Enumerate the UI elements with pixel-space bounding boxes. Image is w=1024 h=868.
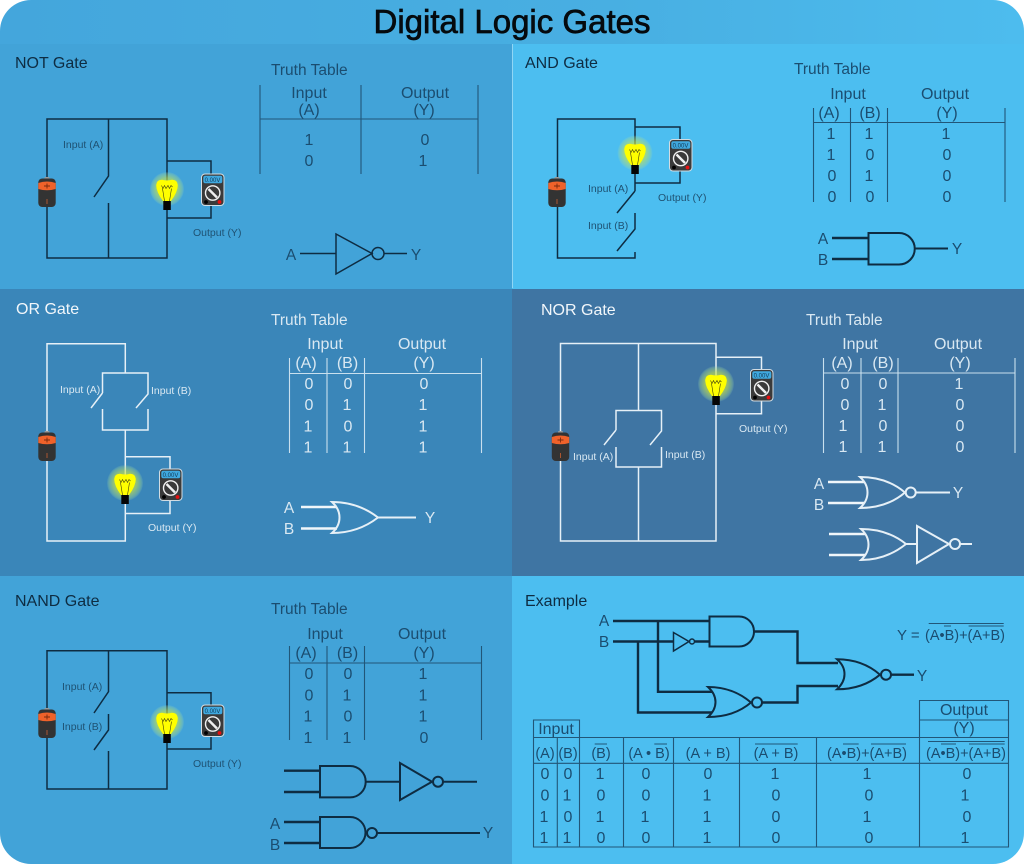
truth table: Example: 0 — [642, 788, 651, 805]
truth table: NOR: 1 — [878, 439, 887, 456]
truth table: NAND: 0 — [305, 688, 314, 704]
truth table: NAND: 0 — [344, 666, 353, 683]
truth table: Example: 1 — [540, 809, 549, 826]
circuit: NOR: Input (B) — [665, 449, 705, 461]
truth table: Example: 0 — [642, 830, 651, 847]
truth table: Example: (Y) — [953, 720, 975, 737]
truth table: Example: 1 — [961, 788, 970, 805]
heading: NAND Gate: NAND Gate — [15, 593, 100, 610]
combined logic diagram: B — [599, 634, 609, 651]
truth table: Example: (A + B) — [686, 746, 730, 762]
truth table: Example: 1 — [961, 830, 970, 847]
gate symbol: AND: B — [818, 252, 828, 269]
truth table: Example: 1 — [596, 809, 605, 826]
panel background: NOT — [0, 44, 512, 289]
truth table: Example: Output — [940, 702, 989, 719]
truth table: NAND: (A) — [295, 645, 317, 662]
truth table: AND: 0 — [943, 189, 952, 206]
gate symbol: NAND — [270, 816, 493, 854]
truth table: OR: 1 — [304, 418, 313, 436]
gate symbol: NOR — [814, 476, 963, 514]
truth table: Example: 1 — [563, 788, 572, 805]
truth table: NOR: 1 — [839, 418, 848, 435]
circuit: NAND: Output (Y) — [193, 758, 241, 770]
title band — [0, 0, 1024, 44]
truth table: Example: 0 — [772, 788, 781, 805]
title: Digital Logic Gates — [374, 3, 650, 40]
truth table: NAND: 1 — [419, 666, 428, 683]
gate symbol: NAND: B — [270, 837, 280, 854]
truth table: AND: (B) — [859, 105, 881, 122]
combined logic diagram: A — [599, 613, 610, 630]
truth table: NAND: Truth Table — [271, 601, 348, 618]
truth table: Example: 0 — [541, 788, 550, 805]
gate symbol: NOR: Y — [953, 485, 963, 502]
circuit: NOT — [38, 119, 241, 258]
truth table: NOR: 1 — [878, 397, 887, 414]
truth table: AND: (Y) — [936, 105, 958, 122]
truth table: NAND: 1 — [343, 730, 352, 747]
truth table: NOR: 1 — [955, 376, 964, 393]
truth table: AND: (A) — [818, 105, 840, 122]
truth table: NOR: 0 — [956, 418, 965, 435]
circuit: NOR — [552, 344, 787, 541]
circuit: NOT: 0.00V — [205, 178, 220, 184]
truth table: NAND: 0 — [305, 666, 314, 683]
panel: AND gate — [525, 55, 1005, 269]
truth table: NOR: (B) — [872, 355, 894, 372]
truth table: NOR: (Y) — [949, 355, 971, 372]
panel: OR gate — [16, 301, 482, 541]
truth table: AND — [794, 61, 1005, 206]
truth table: NOR: 0 — [841, 376, 850, 393]
truth table: AND: 0 — [828, 168, 837, 185]
panel background: OR — [0, 289, 512, 576]
formula: Y = — [897, 627, 920, 644]
truth table: AND: Input — [830, 86, 866, 103]
truth table: NAND — [271, 601, 482, 747]
truth table: OR: 1 — [304, 440, 313, 456]
circuit: NOR: Output (Y) — [739, 423, 787, 435]
gate symbol: OR: B — [284, 521, 294, 538]
truth table: NOR: Output — [934, 336, 983, 353]
circuit: NOR: 0.00V — [754, 374, 769, 380]
formula: (A•B)+(A+B) — [925, 627, 1005, 644]
gate symbol: NOR: A — [814, 476, 825, 493]
truth table: OR: 0 — [420, 376, 429, 393]
truth table: OR: (B) — [337, 355, 358, 372]
truth table: Example: 0 — [597, 830, 606, 847]
truth table: Example: 1 — [641, 809, 650, 826]
panel: Example — [525, 593, 1008, 847]
truth table: NOR: 0 — [879, 376, 888, 393]
truth table: NOT: Input — [291, 85, 327, 102]
truth table: NAND: 1 — [343, 688, 352, 704]
truth table: Example: (B) — [591, 746, 611, 762]
circuit: NOT: Output (Y) — [193, 227, 241, 239]
truth table: AND: 0 — [866, 189, 875, 206]
heading: NOT Gate: NOT Gate — [15, 55, 88, 72]
truth table: NOT: 0 — [305, 153, 314, 170]
gate symbol: AND: A — [818, 231, 829, 248]
truth table: Example: (A • B) — [628, 746, 670, 762]
truth table: Example: 0 — [865, 830, 874, 847]
truth table: NOT: (Y) — [413, 102, 435, 119]
truth table: Example: (A•B)+(A+B) — [827, 746, 907, 762]
truth table: NOT: (A) — [298, 102, 320, 119]
truth table: Example: 1 — [863, 766, 872, 783]
truth table: OR: 0 — [305, 397, 314, 414]
truth table: OR: Truth Table — [271, 312, 348, 329]
circuit: OR — [38, 344, 196, 541]
truth table: AND: 1 — [865, 168, 874, 185]
gate symbol: NAND: A — [270, 816, 281, 833]
circuit: AND: Input (A) — [588, 183, 628, 195]
truth table: OR: 1 — [419, 418, 428, 436]
truth table: OR: 0 — [344, 418, 353, 436]
truth table: NOR: 1 — [839, 439, 848, 456]
panel: NOT gate — [15, 55, 478, 274]
circuit: NAND: Input (A) — [62, 681, 102, 693]
truth table: AND: 0 — [866, 147, 875, 164]
truth table: AND: 0 — [943, 147, 952, 164]
gate symbol: AND: Y — [952, 241, 962, 258]
truth table: Example: 0 — [541, 766, 550, 783]
combined logic diagram — [599, 613, 927, 717]
circuit: NAND: 0.00V — [205, 709, 220, 715]
heading: Example: Example — [525, 593, 587, 610]
truth table: NOT — [260, 62, 478, 174]
panel background: Example — [512, 576, 1024, 866]
gate symbol: AND plus NOT equivalent — [284, 763, 477, 800]
truth table: NAND: 1 — [419, 688, 428, 704]
truth table: Example: 1 — [863, 809, 872, 826]
truth table: Example: 0 — [564, 809, 573, 826]
circuit: OR: Input (A) — [60, 384, 100, 396]
heading: NOR Gate: NOR Gate — [541, 302, 616, 319]
truth table: OR: (A) — [295, 355, 317, 372]
truth table: Example: 0 — [564, 766, 573, 783]
circuit: AND: Output (Y) — [658, 192, 706, 204]
circuit: OR: 0.00V — [163, 473, 178, 479]
circuit: OR: Input (B) — [151, 385, 191, 397]
truth table: Example: (A) — [535, 746, 555, 762]
circuit: AND — [548, 119, 706, 258]
truth table: AND: Truth Table — [794, 61, 871, 78]
truth table: NOR: 0 — [841, 397, 850, 414]
truth table: OR: 1 — [343, 440, 352, 456]
truth table: Example: (A + B) — [754, 746, 798, 762]
circuit: OR: Output (Y) — [148, 522, 196, 534]
heading: OR Gate: OR Gate — [16, 301, 79, 318]
truth table: NAND: 0 — [344, 708, 353, 726]
circuit: NAND — [38, 651, 241, 789]
truth table: NAND: (Y) — [413, 645, 435, 662]
truth table: Example: 0 — [772, 809, 781, 826]
gate symbol: NOT: A — [286, 247, 297, 264]
panel background: NOR — [512, 289, 1024, 576]
truth table: AND: Output — [921, 86, 970, 103]
truth table: NAND: 1 — [304, 708, 313, 726]
circuit: NOT: Input (A) — [63, 139, 103, 151]
truth table: AND: 1 — [942, 126, 951, 143]
circuit: NOR: Input (A) — [573, 451, 613, 463]
truth table: Example: 1 — [596, 766, 605, 783]
truth table: OR: Output — [398, 336, 447, 353]
truth table: OR: 1 — [419, 397, 428, 414]
truth table: NAND: 1 — [304, 730, 313, 747]
truth table: Example: 1 — [703, 830, 712, 847]
panel: NAND gate — [15, 593, 493, 854]
truth table: OR: (Y) — [413, 355, 435, 372]
truth table: Example: 0 — [772, 830, 781, 847]
truth table: OR: 0 — [344, 376, 353, 393]
panel: NOR gate — [541, 302, 1015, 563]
truth table: NOT: 1 — [419, 153, 428, 170]
truth table: OR: 1 — [419, 440, 428, 456]
truth table: NOR: 0 — [879, 418, 888, 435]
truth table: Example: 1 — [703, 809, 712, 826]
truth table: OR: 0 — [305, 376, 314, 393]
gate symbol: OR: A — [284, 500, 295, 517]
gate symbol: OR: Y — [425, 510, 435, 527]
truth table: Example: Input — [538, 721, 574, 738]
gate symbol: NAND: Y — [483, 825, 493, 842]
panel background: NAND — [0, 576, 512, 866]
truth table: OR: 1 — [343, 397, 352, 414]
truth table: Example: (B) — [558, 746, 578, 762]
truth table: NAND: 0 — [420, 730, 429, 747]
truth table: NOR: Input — [842, 336, 878, 353]
panel background: AND — [512, 44, 1024, 289]
truth table: Example — [534, 700, 1008, 847]
heading: AND Gate: AND Gate — [525, 55, 598, 72]
truth table: NAND: (B) — [337, 645, 358, 662]
truth table: Example: 0 — [704, 766, 713, 783]
truth table: NOR: Truth Table — [806, 312, 883, 329]
truth table: NOT: 1 — [305, 132, 314, 149]
truth table: OR: Input — [307, 336, 343, 353]
circuit: AND: Input (B) — [588, 220, 628, 232]
truth table: NOR — [806, 312, 1015, 456]
truth table: Example: 0 — [642, 766, 651, 783]
truth table: NOR: (A) — [831, 355, 853, 372]
truth table: Example: 1 — [540, 830, 549, 847]
gate symbol: OR — [284, 500, 435, 538]
gate symbol: AND — [818, 231, 962, 269]
truth table: Example: 1 — [771, 766, 780, 783]
gate symbol: NOT: Y — [411, 247, 421, 264]
truth table: NOR: 0 — [956, 439, 965, 456]
truth table: NAND: Input — [307, 626, 343, 643]
truth table: Example: 1 — [563, 830, 572, 847]
truth table: NOR: 0 — [956, 397, 965, 414]
formula — [897, 624, 1005, 644]
truth table: AND: 1 — [865, 126, 874, 143]
truth table: NOT: Output — [401, 85, 450, 102]
truth table: OR — [271, 312, 482, 456]
circuit: AND: 0.00V — [673, 144, 688, 150]
gate symbol: NOT — [286, 234, 421, 274]
combined logic diagram: Y — [917, 668, 927, 685]
truth table: Example: 0 — [963, 766, 972, 783]
circuit: NAND: Input (B) — [62, 721, 102, 733]
truth table: NOT: Truth Table — [271, 62, 348, 79]
truth table: AND: 1 — [827, 126, 836, 143]
gate symbol: NOR: B — [814, 497, 824, 514]
gate symbol: OR plus NOT equivalent — [829, 526, 972, 563]
truth table: AND: 1 — [827, 147, 836, 164]
truth table: Example: 0 — [865, 788, 874, 805]
truth table: NAND: 1 — [419, 708, 428, 726]
truth table: NOT: 0 — [421, 132, 430, 149]
truth table: AND: 0 — [943, 168, 952, 185]
truth table: Example: 0 — [963, 809, 972, 826]
truth table: NAND: Output — [398, 626, 447, 643]
truth table: Example: 1 — [703, 788, 712, 805]
truth table: AND: 0 — [828, 189, 837, 206]
truth table: Example: 0 — [597, 788, 606, 805]
truth table: Example: (A•B)+(A+B) — [926, 746, 1006, 762]
